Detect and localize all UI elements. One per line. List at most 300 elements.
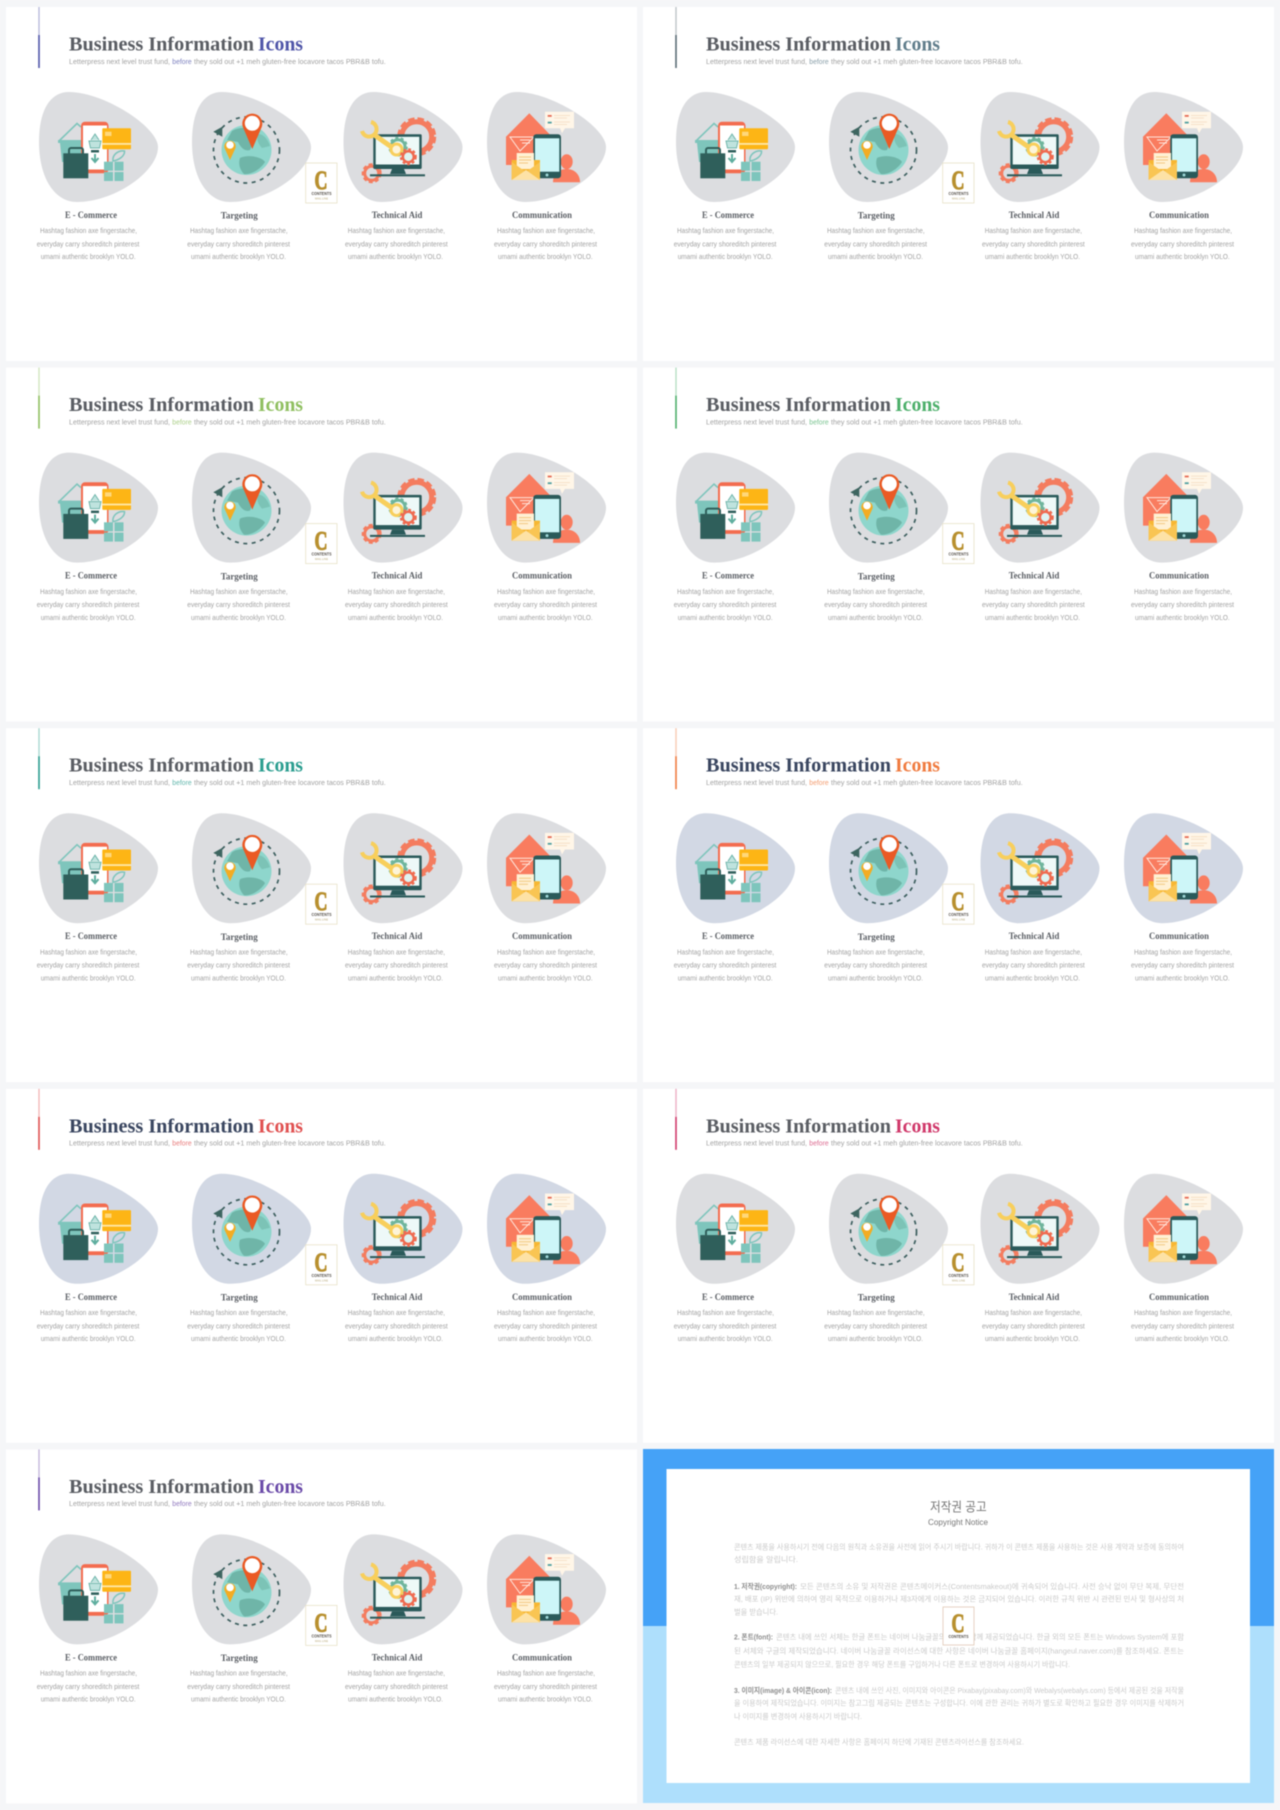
column: e-commerce <box>674 813 795 982</box>
watermark <box>306 1245 337 1285</box>
subtitle <box>706 417 1023 426</box>
subtitle: Letterpress next level trust fund, <box>69 778 170 787</box>
column: targeting: Hashtag fashion axe fingerstache, <box>827 947 925 956</box>
column: targeting: Targeting <box>221 1293 258 1303</box>
column: technical aid: umami authentic brooklyn YOLO. <box>348 973 443 982</box>
column: communication: Communication <box>512 571 572 581</box>
column: communication: umami authentic brooklyn YOLO. <box>498 613 593 622</box>
column: e-commerce <box>37 1534 158 1704</box>
column: technical aid: umami authentic brooklyn YOLO. <box>348 252 443 261</box>
accent line <box>675 368 677 396</box>
title: Icons <box>895 755 940 777</box>
column: e-commerce: Hashtag fashion axe fingerstache, <box>677 947 774 956</box>
column: e-commerce: everyday carry shoreditch pinterest <box>37 1682 140 1691</box>
column: e-commerce <box>37 453 158 622</box>
notice section: copyright: 재, 배포 (IP) 위반에 의하여 영리 목적으로 이용하거나 제3자에게 이용하는 것은 금지되어 있습니다. 이러한 규칙 위반 시 관련된 민사 및 형사상의 처 <box>734 1594 1184 1604</box>
column: communication <box>487 813 606 982</box>
column: targeting: umami authentic brooklyn YOLO. <box>828 252 923 261</box>
column: technical aid <box>344 92 462 261</box>
column: targeting: everyday carry shoreditch pinterest <box>187 240 291 248</box>
column: targeting: Hashtag fashion axe fingerstache, <box>190 1669 288 1678</box>
column: technical aid <box>344 453 462 622</box>
watermark: C <box>952 527 964 556</box>
column: technical aid <box>980 813 1100 982</box>
column: technical aid: umami authentic brooklyn YOLO. <box>985 613 1080 622</box>
title: Business Information <box>706 34 892 56</box>
notice section: font <box>734 1632 1184 1669</box>
watermark: C <box>952 887 964 916</box>
column: technical aid: Hashtag fashion axe fingerstache, <box>348 1308 445 1317</box>
column: targeting: Targeting <box>221 1653 258 1663</box>
watermark: CONTENTS <box>948 1634 968 1639</box>
column: targeting: Targeting <box>858 932 895 942</box>
subtitle <box>69 1499 386 1508</box>
column: targeting: everyday carry shoreditch pinterest <box>824 961 928 970</box>
column: targeting: Hashtag fashion axe fingerstache, <box>827 226 925 235</box>
column: technical aid: Hashtag fashion axe fingerstache, <box>348 587 445 596</box>
notice intro: 성립함을 알립니다. <box>734 1554 798 1564</box>
watermark: MAIL LINE <box>315 1639 328 1643</box>
column: e-commerce: Hashtag fashion axe fingerstache, <box>40 226 137 235</box>
notice section: image and icon: 3. 이미지(image) & 아이콘(icon): <box>734 1685 832 1695</box>
column: e-commerce: Hashtag fashion axe fingerstache, <box>40 947 137 956</box>
column: targeting <box>824 92 948 261</box>
title: Icons <box>258 1115 303 1137</box>
column: e-commerce: everyday carry shoreditch pinterest <box>37 1321 140 1330</box>
column: e-commerce: E - Commerce <box>702 210 754 220</box>
column: technical aid: Technical Aid <box>372 571 422 581</box>
subtitle <box>706 57 1023 66</box>
column: technical aid: everyday carry shoreditch pinterest <box>345 961 449 970</box>
column: e-commerce: E - Commerce <box>65 1292 117 1302</box>
title: Business Information <box>69 1476 255 1498</box>
accent line <box>675 1089 677 1117</box>
column: technical aid: everyday carry shoreditch pinterest <box>982 240 1086 248</box>
watermark: CONTENTS <box>948 552 968 557</box>
column: e-commerce: umami authentic brooklyn YOLO. <box>678 252 773 261</box>
notice footer: 콘텐츠 제품 라이선스에 대한 자세한 사항은 홈페이지 하단에 기재된 콘텐츠라이선스를 참조하세요. <box>734 1736 1024 1746</box>
watermark: C <box>314 166 328 195</box>
watermark: CONTENTS <box>948 191 968 196</box>
notice section: font: 2. 폰트(font): <box>734 1633 773 1642</box>
column: e-commerce: umami authentic brooklyn YOLO. <box>41 973 136 982</box>
subtitle: they sold out +1 meh gluten-free locavore tacos PBR&B tofu. <box>831 1139 1023 1148</box>
title: Business Information <box>69 34 255 56</box>
notice section: copyright: 1. 저작권(copyright): <box>734 1581 797 1591</box>
panel: green slide <box>643 368 1274 722</box>
column: communication: Hashtag fashion axe fingerstache, <box>1134 947 1232 956</box>
watermark: MAIL LINE <box>952 196 965 200</box>
column: targeting: everyday carry shoreditch pinterest <box>187 961 291 970</box>
watermark: CONTENTS <box>312 1633 332 1638</box>
column: technical aid: Technical Aid <box>1009 931 1059 941</box>
column: targeting: Targeting <box>858 1293 895 1303</box>
watermark <box>943 884 974 924</box>
column: technical aid: Hashtag fashion axe fingerstache, <box>348 1669 445 1678</box>
column: e-commerce: everyday carry shoreditch pinterest <box>674 600 777 609</box>
column: targeting: Hashtag fashion axe fingerstache, <box>190 1308 288 1317</box>
column: e-commerce <box>37 1174 158 1343</box>
column: technical aid <box>980 1174 1100 1343</box>
column: e-commerce: umami authentic brooklyn YOLO. <box>678 973 773 982</box>
subtitle: they sold out +1 meh gluten-free locavore tacos PBR&B tofu. <box>194 1499 386 1508</box>
watermark: C <box>952 166 964 195</box>
column: targeting: umami authentic brooklyn YOLO. <box>828 973 923 982</box>
column: e-commerce: everyday carry shoreditch pinterest <box>37 240 140 248</box>
column: communication: umami authentic brooklyn YOLO. <box>498 973 593 982</box>
column: targeting: everyday carry shoreditch pinterest <box>187 1321 291 1330</box>
subtitle: before <box>172 778 192 787</box>
column: communication <box>1124 453 1243 622</box>
watermark: CONTENTS <box>312 1273 332 1278</box>
column: technical aid: umami authentic brooklyn YOLO. <box>985 252 1080 261</box>
column: technical aid: umami authentic brooklyn YOLO. <box>348 1695 443 1704</box>
column: technical aid: everyday carry shoreditch pinterest <box>982 600 1086 609</box>
column: e-commerce: E - Commerce <box>702 1292 754 1302</box>
column: communication: Hashtag fashion axe fingerstache, <box>497 947 595 956</box>
column: e-commerce: everyday carry shoreditch pinterest <box>37 961 140 970</box>
notice section: image and icon: 콘텐츠 내에 쓰인 사진, 이미지와 아이콘은 Pixabay(pixabay.com)와 Webalys(webalys.com) 등에서 제공된 것을 저작물 <box>835 1685 1184 1695</box>
subtitle: before <box>172 1499 192 1508</box>
subtitle: Letterpress next level trust fund, <box>706 778 807 787</box>
column: technical aid: everyday carry shoreditch pinterest <box>345 240 449 248</box>
subtitle: before <box>809 778 829 787</box>
column: targeting: Targeting <box>858 211 895 221</box>
column: technical aid: Technical Aid <box>372 931 422 941</box>
notice section: copyright <box>734 1581 1184 1616</box>
column: technical aid: umami authentic brooklyn YOLO. <box>985 973 1080 982</box>
column: communication: umami authentic brooklyn YOLO. <box>1135 1334 1230 1343</box>
column: communication: umami authentic brooklyn YOLO. <box>1135 973 1230 982</box>
column: technical aid: umami authentic brooklyn YOLO. <box>985 1334 1080 1343</box>
title: Icons <box>258 34 303 56</box>
column: e-commerce: Hashtag fashion axe fingerstache, <box>40 1308 137 1317</box>
subtitle: they sold out +1 meh gluten-free locavore tacos PBR&B tofu. <box>194 1139 386 1148</box>
column: technical aid: everyday carry shoreditch pinterest <box>982 1321 1086 1330</box>
column: communication: umami authentic brooklyn YOLO. <box>1135 252 1230 261</box>
watermark: C <box>314 1248 328 1277</box>
subtitle <box>69 57 386 66</box>
column: e-commerce: Hashtag fashion axe fingerstache, <box>40 587 137 596</box>
watermark: CONTENTS <box>948 1273 968 1278</box>
column: targeting: everyday carry shoreditch pinterest <box>824 240 928 248</box>
accent line <box>38 728 40 756</box>
watermark <box>306 163 337 203</box>
panel: orange slide <box>643 728 1274 1082</box>
column: communication: everyday carry shoreditch pinterest <box>494 600 598 609</box>
column: targeting: Hashtag fashion axe fingerstache, <box>190 226 288 235</box>
column: communication <box>1124 92 1243 261</box>
panel: teal slide <box>6 728 637 1082</box>
watermark: MAIL LINE <box>315 557 328 561</box>
column: e-commerce: everyday carry shoreditch pinterest <box>37 600 140 609</box>
watermark: MAIL LINE <box>315 918 328 922</box>
column: communication: umami authentic brooklyn YOLO. <box>498 1695 593 1704</box>
subtitle: Letterpress next level trust fund, <box>69 1499 170 1508</box>
column: e-commerce: everyday carry shoreditch pinterest <box>674 240 777 248</box>
column: communication: Hashtag fashion axe fingerstache, <box>497 226 595 235</box>
column: technical aid: Technical Aid <box>1009 210 1059 220</box>
notice section: image and icon <box>734 1685 1184 1721</box>
column: technical aid: Hashtag fashion axe fingerstache, <box>985 226 1082 235</box>
column: communication <box>487 1534 606 1704</box>
accent line <box>38 1089 40 1117</box>
subtitle: Letterpress next level trust fund, <box>706 57 807 66</box>
notice section: font: 콘텐츠 내에 쓰인 서체는 한글 폰트는 네이버 나눔글꼴의 서체와 함께 제공되었습니다. 한글 외의 모든 폰트는 Windows System에 포함 <box>776 1632 1184 1642</box>
subtitle <box>69 1139 386 1148</box>
column: e-commerce <box>37 813 158 982</box>
column: targeting <box>824 1174 948 1343</box>
column: targeting: Targeting <box>221 932 258 942</box>
title: Icons <box>895 394 940 416</box>
column: communication: umami authentic brooklyn YOLO. <box>498 1334 593 1343</box>
subtitle: before <box>809 417 829 426</box>
title: Icons <box>258 394 303 416</box>
title: Icons <box>258 1476 303 1498</box>
column: technical aid: Technical Aid <box>1009 1292 1059 1302</box>
column: e-commerce: umami authentic brooklyn YOLO. <box>678 1334 773 1343</box>
column: targeting <box>824 453 948 622</box>
column: technical aid <box>344 1174 462 1343</box>
watermark: CONTENTS <box>312 912 332 917</box>
column: targeting <box>187 453 311 622</box>
panel: copyright notice <box>643 1449 1274 1803</box>
column: e-commerce <box>37 92 158 261</box>
subtitle: Letterpress next level trust fund, <box>706 1139 807 1148</box>
watermark: MAIL LINE <box>315 196 328 200</box>
column: technical aid: Hashtag fashion axe fingerstache, <box>985 587 1082 596</box>
column: communication: everyday carry shoreditch pinterest <box>494 961 598 970</box>
column: technical aid: Hashtag fashion axe fingerstache, <box>985 947 1082 956</box>
column: targeting: Targeting <box>858 571 895 581</box>
column: targeting: everyday carry shoreditch pinterest <box>187 600 291 609</box>
column: targeting: umami authentic brooklyn YOLO. <box>191 1695 286 1704</box>
column: communication <box>1124 813 1243 982</box>
column: communication <box>487 1174 606 1343</box>
column: targeting: Hashtag fashion axe fingerstache, <box>190 587 288 596</box>
column: targeting <box>824 813 948 982</box>
subtitle: they sold out +1 meh gluten-free locavore tacos PBR&B tofu. <box>831 57 1023 66</box>
column: e-commerce: E - Commerce <box>65 1652 117 1662</box>
subtitle: they sold out +1 meh gluten-free locavore tacos PBR&B tofu. <box>831 778 1023 787</box>
column: technical aid <box>980 453 1100 622</box>
subtitle: they sold out +1 meh gluten-free locavore tacos PBR&B tofu. <box>194 417 386 426</box>
notice section: font: 콘텐츠의 일부 제공되지 않으므로, 필요한 경우 해당 폰트를 구입하거나 다른 폰트로 변경하여 사용하시기 바랍니다. <box>734 1659 1070 1669</box>
accent line <box>38 368 40 396</box>
subtitle: before <box>809 1139 829 1148</box>
notice section: font: 된 서체와 구글의 제작되었습니다. 네이버 나눔글꼴 라이선스에 대한 사항은 네이버 나눔글꼴 홈페이지(hangeul.naver.com)를 참조하세요. 폰트는 <box>734 1646 1184 1656</box>
column: communication: umami authentic brooklyn YOLO. <box>1135 613 1230 622</box>
title: Business Information <box>69 1115 255 1137</box>
notice intro <box>734 1542 1184 1564</box>
notice section: copyright: 벌을 받습니다. <box>734 1606 778 1616</box>
watermark: MAIL LINE <box>952 1278 965 1282</box>
column: targeting: Targeting <box>221 571 258 581</box>
column: technical aid: umami authentic brooklyn YOLO. <box>348 613 443 622</box>
column: technical aid: Technical Aid <box>372 1652 422 1662</box>
column: technical aid: Technical Aid <box>372 1292 422 1302</box>
column: communication: everyday carry shoreditch pinterest <box>494 1321 598 1330</box>
subtitle: Letterpress next level trust fund, <box>706 417 807 426</box>
column: communication: everyday carry shoreditch pinterest <box>494 1682 598 1691</box>
notice subheading: Copyright Notice <box>928 1517 988 1527</box>
column: e-commerce <box>674 1174 795 1343</box>
column: communication <box>487 92 606 261</box>
column: communication: everyday carry shoreditch pinterest <box>1131 1321 1235 1330</box>
column: targeting <box>187 1534 311 1704</box>
column: targeting: everyday carry shoreditch pinterest <box>824 600 928 609</box>
column: technical aid <box>980 92 1100 261</box>
column: targeting: Hashtag fashion axe fingerstache, <box>827 1308 925 1317</box>
panel: lime slide <box>6 368 637 722</box>
column: targeting: umami authentic brooklyn YOLO. <box>191 252 286 261</box>
column: communication <box>487 453 606 622</box>
watermark: C <box>314 1608 328 1637</box>
column: technical aid: umami authentic brooklyn YOLO. <box>348 1334 443 1343</box>
column: targeting: umami authentic brooklyn YOLO. <box>191 973 286 982</box>
watermark: C <box>314 527 328 556</box>
title: Business Information <box>69 755 255 777</box>
column: technical aid: Hashtag fashion axe fingerstache, <box>348 226 445 235</box>
column: communication: Communication <box>512 1652 572 1662</box>
column: technical aid: Hashtag fashion axe fingerstache, <box>348 947 445 956</box>
column: targeting: everyday carry shoreditch pinterest <box>187 1682 291 1691</box>
column: targeting: umami authentic brooklyn YOLO. <box>191 1334 286 1343</box>
column: technical aid: everyday carry shoreditch pinterest <box>982 961 1086 970</box>
title: Business Information <box>706 394 892 416</box>
column: technical aid: Technical Aid <box>372 210 422 220</box>
column: e-commerce <box>674 92 795 261</box>
column: communication <box>1124 1174 1243 1343</box>
column: technical aid: Technical Aid <box>1009 571 1059 581</box>
column: communication: Communication <box>1149 931 1209 941</box>
watermark: MAIL LINE <box>315 1278 328 1282</box>
watermark <box>943 1607 974 1645</box>
panel: indigo slide <box>6 7 637 361</box>
watermark: C <box>952 1248 964 1277</box>
column: communication: Communication <box>1149 1292 1209 1302</box>
title: Icons <box>895 1115 940 1137</box>
column: targeting: umami authentic brooklyn YOLO. <box>828 1334 923 1343</box>
title: Business Information <box>706 755 892 777</box>
subtitle <box>69 417 386 426</box>
column: communication: Communication <box>1149 210 1209 220</box>
accent line <box>675 7 677 35</box>
accent line <box>38 1449 40 1477</box>
column: technical aid <box>344 813 462 982</box>
column: technical aid: Hashtag fashion axe fingerstache, <box>985 1308 1082 1317</box>
column: technical aid: everyday carry shoreditch pinterest <box>345 1682 449 1691</box>
column: e-commerce: umami authentic brooklyn YOLO. <box>41 1695 136 1704</box>
panel: purple slide <box>6 1449 637 1803</box>
column: technical aid: everyday carry shoreditch pinterest <box>345 1321 449 1330</box>
column: e-commerce: umami authentic brooklyn YOLO. <box>41 1334 136 1343</box>
accent line <box>38 7 40 35</box>
subtitle: before <box>172 57 192 66</box>
subtitle: before <box>172 1139 192 1148</box>
watermark: MAIL LINE <box>952 557 965 561</box>
subtitle: they sold out +1 meh gluten-free locavore tacos PBR&B tofu. <box>194 778 386 787</box>
subtitle: Letterpress next level trust fund, <box>69 1139 170 1148</box>
watermark: MAIL LINE <box>952 918 965 922</box>
column: communication: Hashtag fashion axe fingerstache, <box>497 1308 595 1317</box>
column: e-commerce: everyday carry shoreditch pinterest <box>674 961 777 970</box>
title: Icons <box>258 755 303 777</box>
column: communication: Hashtag fashion axe fingerstache, <box>1134 587 1232 596</box>
accent line <box>675 728 677 756</box>
panel: crimson slide <box>643 1089 1274 1443</box>
watermark <box>943 524 974 564</box>
column: targeting: Hashtag fashion axe fingerstache, <box>827 587 925 596</box>
column: targeting: umami authentic brooklyn YOLO. <box>828 613 923 622</box>
watermark <box>306 884 337 924</box>
column: e-commerce: Hashtag fashion axe fingerstache, <box>677 1308 774 1317</box>
column: technical aid: everyday carry shoreditch pinterest <box>345 600 449 609</box>
column: e-commerce: E - Commerce <box>65 571 117 581</box>
watermark <box>306 1605 337 1645</box>
watermark: CONTENTS <box>312 552 332 557</box>
column: e-commerce: umami authentic brooklyn YOLO. <box>41 613 136 622</box>
column: targeting: everyday carry shoreditch pinterest <box>824 1321 928 1330</box>
subtitle <box>69 778 386 787</box>
column: targeting: Hashtag fashion axe fingerstache, <box>190 947 288 956</box>
panel: red slide <box>6 1089 637 1443</box>
column: communication: Hashtag fashion axe fingerstache, <box>497 1669 595 1678</box>
column: communication: everyday carry shoreditch pinterest <box>1131 961 1235 970</box>
column: e-commerce <box>674 453 795 622</box>
watermark: CONTENTS <box>948 912 968 917</box>
column: communication: Hashtag fashion axe fingerstache, <box>497 587 595 596</box>
title: Business Information <box>706 1115 892 1137</box>
title: Icons <box>895 34 940 56</box>
column: communication: Communication <box>1149 571 1209 581</box>
subtitle <box>706 1139 1023 1148</box>
watermark <box>943 163 974 203</box>
column: targeting: umami authentic brooklyn YOLO. <box>191 613 286 622</box>
notice section: copyright: 모든 콘텐츠의 소유 및 저작권은 콘텐츠메이커스(Contentsmakeout)에 귀속되어 있습니다. 사전 승낙 없이 무단 복제, 무단전 <box>800 1581 1184 1591</box>
column: e-commerce: umami authentic brooklyn YOLO. <box>678 613 773 622</box>
column: e-commerce: Hashtag fashion axe fingerstache, <box>677 587 774 596</box>
column: targeting <box>187 813 311 982</box>
watermark <box>943 1245 974 1285</box>
column: communication: Hashtag fashion axe fingerstache, <box>1134 1308 1232 1317</box>
title: Business Information <box>69 394 255 416</box>
notice heading: 저작권 공고 <box>930 1500 987 1514</box>
column: communication: Communication <box>512 931 572 941</box>
panel: slate slide <box>643 7 1274 361</box>
column: communication: Communication <box>512 210 572 220</box>
watermark <box>306 524 337 564</box>
column: communication: umami authentic brooklyn YOLO. <box>498 252 593 261</box>
column: communication: everyday carry shoreditch pinterest <box>494 240 598 248</box>
subtitle: Letterpress next level trust fund, <box>69 57 170 66</box>
column: communication: Hashtag fashion axe fingerstache, <box>1134 226 1232 235</box>
column: e-commerce: E - Commerce <box>702 571 754 581</box>
column: technical aid <box>344 1534 462 1704</box>
subtitle: before <box>809 57 829 66</box>
subtitle <box>706 778 1023 787</box>
notice intro: 콘텐츠 제품을 사용하시기 전에 다음의 원칙과 소유권을 사전에 읽어 주시기 바랍니다. 귀하가 이 콘텐츠 제품을 사용하는 것은 사용 계약과 보증에 동의하여 <box>734 1542 1184 1552</box>
column: communication: Communication <box>512 1292 572 1302</box>
watermark: C <box>314 887 328 916</box>
watermark: CONTENTS <box>312 191 332 196</box>
column: e-commerce: E - Commerce <box>702 931 754 941</box>
column: targeting: Targeting <box>221 211 258 221</box>
column: targeting <box>187 92 311 261</box>
subtitle: before <box>172 417 192 426</box>
column: e-commerce: E - Commerce <box>65 210 117 220</box>
subtitle: Letterpress next level trust fund, <box>69 417 170 426</box>
